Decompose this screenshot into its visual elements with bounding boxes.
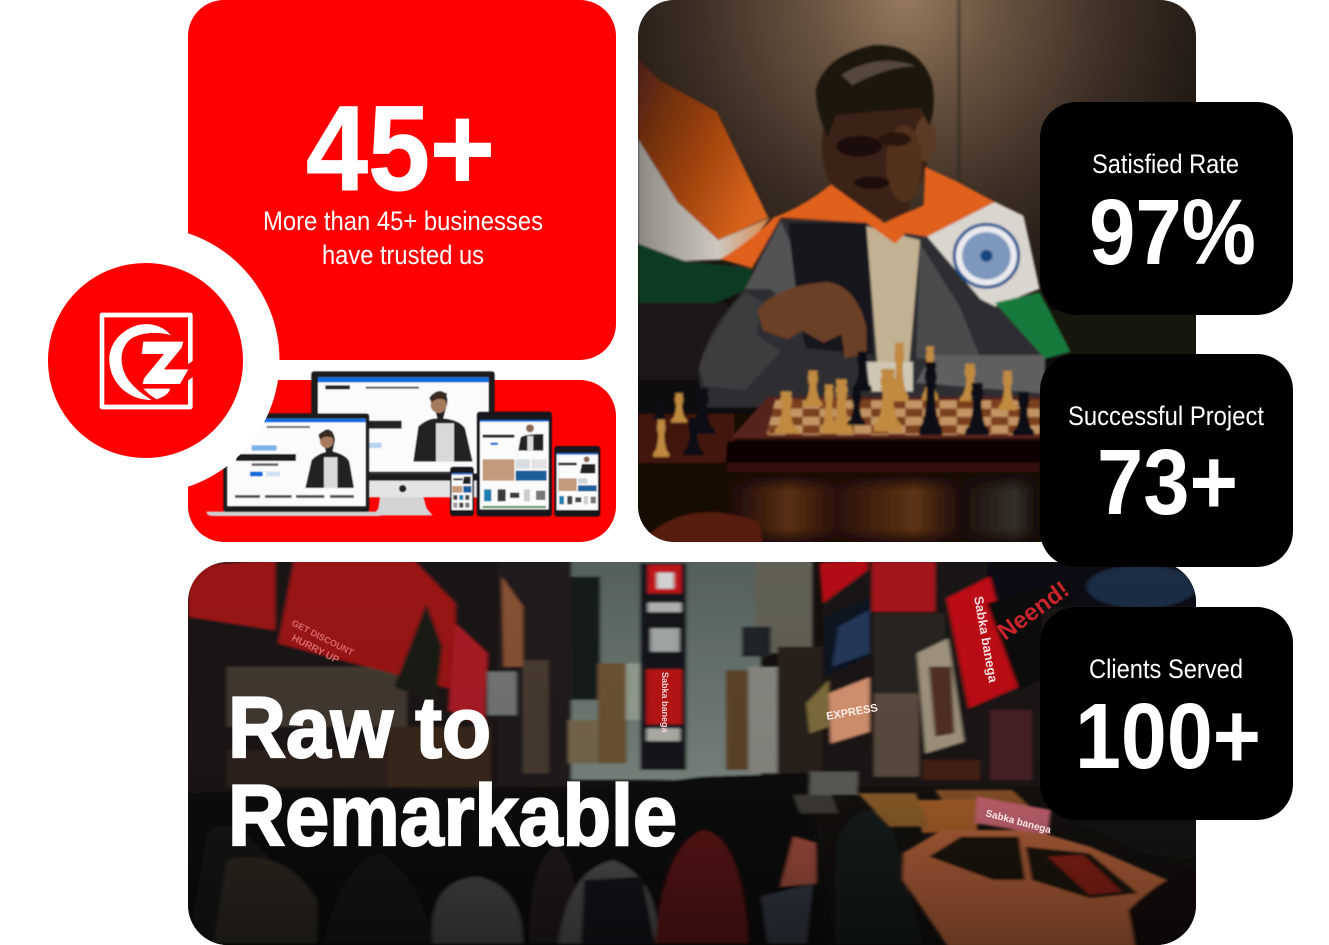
logo mark frame bbox=[102, 315, 190, 407]
man head and hair bbox=[816, 45, 936, 219]
stat card: successful project bbox=[1040, 354, 1293, 567]
panel: responsive devices bbox=[188, 371, 616, 542]
billboard lettering: GET DISCOUNT bbox=[290, 618, 356, 658]
stat card: satisfied rate bbox=[1040, 102, 1293, 315]
left billboards bbox=[188, 560, 488, 727]
title: Raw to Remarkable: Raw to bbox=[228, 680, 491, 776]
billboard lettering: Sabka banega bbox=[984, 808, 1052, 836]
center tower bbox=[640, 563, 687, 770]
table and chess board bbox=[638, 395, 1042, 542]
panel: 45+ businesses bbox=[188, 0, 616, 360]
big number 45+: 45+ bbox=[306, 80, 495, 216]
right billboards bbox=[806, 560, 1070, 780]
left buildings bbox=[188, 560, 640, 800]
businesses caption: have trusted us bbox=[322, 240, 484, 270]
billboard lettering: Neend! bbox=[993, 576, 1074, 646]
stat value: 97% bbox=[1089, 180, 1256, 284]
flag in background bbox=[638, 59, 770, 303]
stat label: Satisfied Rate bbox=[1092, 149, 1239, 179]
billboard lettering: HURRY UP bbox=[290, 633, 341, 666]
stat value: 100+ bbox=[1075, 684, 1261, 788]
businesses caption bbox=[263, 206, 543, 270]
panel: chess photo bbox=[638, 0, 1200, 553]
device: tablet bbox=[477, 412, 552, 516]
logo mark C and Z bbox=[109, 324, 188, 400]
stat card: clients served bbox=[1040, 607, 1293, 820]
hand bbox=[758, 282, 866, 358]
right buildings bbox=[726, 560, 1209, 787]
device: large phone bbox=[554, 446, 600, 517]
sky bbox=[568, 560, 761, 780]
billboard lettering: Sabka banega bbox=[971, 595, 1001, 684]
billboard lettering: Sabka banega bbox=[660, 672, 670, 734]
device: small phone bbox=[450, 467, 474, 516]
businesses caption: More than 45+ businesses bbox=[263, 206, 543, 236]
device: desktop monitor bbox=[311, 371, 495, 515]
stat label: Clients Served bbox=[1089, 654, 1243, 684]
chess pieces bbox=[653, 343, 1035, 457]
panel: city photo bbox=[188, 560, 1209, 945]
scarf and flag on shoulders bbox=[720, 167, 1070, 358]
billboard lettering bbox=[290, 576, 1074, 836]
logo badge bbox=[12, 226, 280, 494]
man suit bbox=[699, 219, 1045, 407]
stat label: Successful Project bbox=[1068, 401, 1264, 431]
yellow taxis bbox=[793, 790, 1198, 945]
street crowd bbox=[188, 772, 922, 945]
title: Raw to Remarkable bbox=[228, 680, 677, 864]
title: Raw to Remarkable: Remarkable bbox=[228, 768, 677, 864]
billboard lettering: EXPRESS bbox=[825, 702, 879, 723]
stat value: 73+ bbox=[1097, 430, 1238, 534]
device: laptop bbox=[207, 413, 384, 516]
